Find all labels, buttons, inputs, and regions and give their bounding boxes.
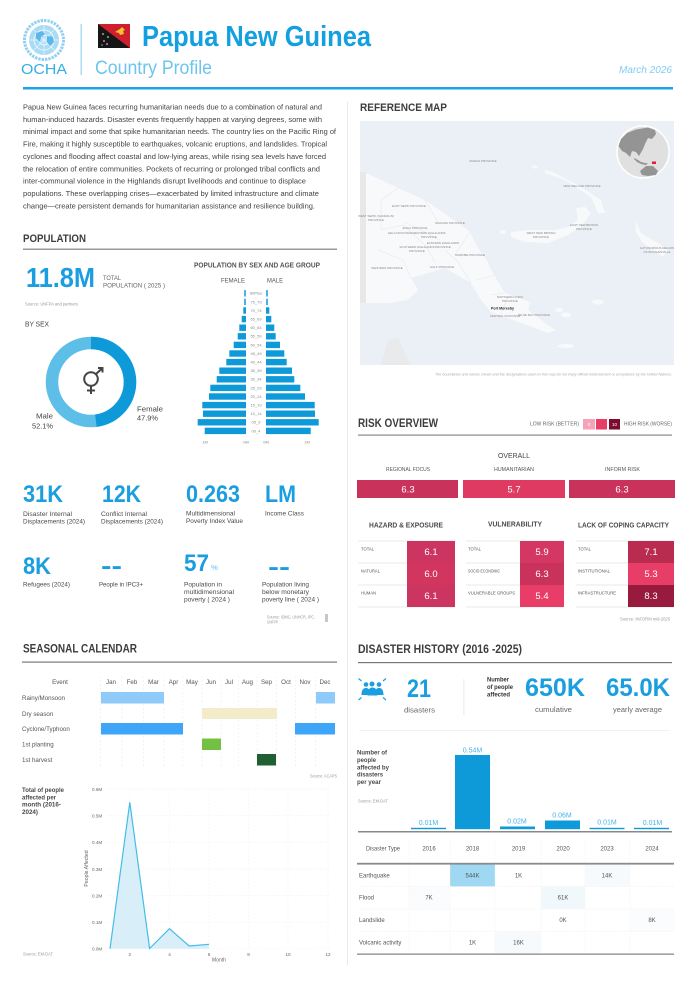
people affected label: affected: [487, 692, 510, 698]
x axis labels: 8: [247, 952, 250, 957]
table rows: [359, 874, 656, 946]
calendar months: Event: [52, 679, 68, 686]
bar chart label: affected by: [357, 764, 389, 771]
source: em-dat monthly: Source: EM-DAT: [23, 952, 53, 956]
table rows: 14K: [602, 874, 612, 880]
x axis labels: 10: [285, 952, 291, 957]
population pyramid: FEMALE: [221, 278, 246, 284]
overall scores: 5.7: [507, 484, 521, 496]
calendar rows: 1st planting: [22, 742, 54, 749]
stat: multidimensional poverty: %: [211, 563, 218, 572]
map labels: Port Moresby: [491, 306, 514, 310]
stat: income class: [265, 481, 305, 518]
donut chart: by sex: [32, 343, 163, 430]
table rows: Volcanic activity: [359, 940, 401, 946]
calendar rows: Dry season: [22, 711, 54, 718]
heading: disaster history: DISASTER HISTORY (2016 -2025): [358, 644, 522, 656]
heading: population: POPULATION: [23, 233, 86, 245]
table: hazard and exposure: HUMAN: [361, 590, 376, 596]
subtitle: Country Profile: [95, 58, 212, 79]
table: hazard and exposure: [358, 522, 455, 607]
map labels: MADANG PROVINCE: [435, 221, 465, 225]
age labels: 45_49: [250, 351, 262, 356]
age labels: 20_24: [250, 394, 262, 399]
risk legend: 0: [588, 422, 591, 427]
total population figure: Source: UNFPA and partners: [25, 302, 79, 306]
table: vulnerability: [466, 522, 564, 607]
intro text: cyclones and flooding affect coastal and low-lying areas, while rising sea levels have forced: [23, 152, 326, 161]
overall scores: OVERALL: [498, 453, 530, 460]
risk legend: 10: [612, 422, 617, 427]
overall scores: 6.3: [615, 484, 629, 496]
intro text: inter-communal violence in the Highlands disrupt livelihoods and continue to displace: [23, 176, 306, 186]
table: lack of coping capacity: INSTITUTIONAL: [578, 568, 610, 574]
calendar months: Mar: [148, 679, 159, 686]
bar chart label: disasters: [357, 772, 383, 779]
age labels: 05_9: [252, 420, 261, 425]
heat table: disaster type by year: [357, 840, 674, 955]
stat: disaster displacements: Disaster Internal: [23, 511, 73, 518]
line chart: [84, 787, 331, 964]
bar chart: people affected per year: 0.06M: [552, 812, 572, 820]
table header: 2019: [512, 846, 526, 852]
age labels: 15_19: [250, 402, 262, 408]
locator globe: [617, 126, 669, 178]
map labels: WESTERN HIGHLANDS: [412, 231, 446, 235]
map labels: ENGA PROVINCE: [403, 226, 427, 230]
table header: 2018: [466, 846, 480, 852]
table: vulnerability: VULNERABILITY: [488, 522, 542, 528]
age labels: 80Plus: [250, 291, 262, 296]
line chart: People Affected: [84, 850, 90, 887]
total population figure: 11.8M: [26, 262, 95, 293]
panel: seasonal calendar: [22, 644, 337, 778]
age labels: 25_29: [250, 385, 262, 390]
panel: population: [23, 233, 337, 444]
x axis labels: 12: [325, 952, 331, 957]
calendar months: Jul: [225, 679, 233, 686]
stat: multidimensional poverty: multidimensional: [184, 589, 235, 596]
stat: cumulative: cumulative: [535, 707, 572, 714]
icon: Papua New Guinea flag: [98, 24, 130, 48]
bar chart: people affected per year: 0.01M: [597, 820, 617, 826]
pyramid axis: 1M: [202, 440, 208, 444]
stat: monetary poverty: [262, 554, 319, 604]
table: hazard and exposure: 6.0: [424, 569, 438, 580]
map labels: PROVINCE: [409, 249, 425, 253]
map labels: EAST SEPIK PROVINCE: [392, 204, 426, 208]
risk legend: [530, 419, 672, 430]
stat: yearly average: [606, 674, 670, 714]
table: hazard and exposure: NATURAL: [361, 568, 380, 574]
age labels: 60_64: [250, 325, 262, 330]
table header: 2024: [645, 846, 659, 852]
overall scores: REGIONAL FOCUS: [386, 467, 430, 473]
stat: conflict displacements: [101, 481, 163, 526]
stat: cumulative: 650K: [525, 674, 585, 702]
stat: refugees: Refugees (2024): [23, 582, 70, 588]
stat: IPC3+: [99, 553, 143, 588]
panel: key figures: [23, 481, 328, 624]
population pyramid: POPULATION BY SEX AND AGE GROUP: [194, 260, 320, 270]
calendar months: Jun: [206, 679, 217, 686]
donut chart: by sex: 47.9%: [137, 414, 158, 422]
risk legend: HIGH RISK (WORSE): [624, 422, 672, 428]
calendar rows: Cyclone/Typhoon: [22, 726, 70, 733]
calendar rows: [22, 692, 335, 766]
icon: UN OCHA logo: OCHA: [21, 62, 67, 78]
map labels: PROVINCE: [421, 235, 437, 239]
age labels: 00_4: [252, 428, 261, 433]
map labels: PROVINCE: [576, 227, 592, 231]
table: lack of coping capacity: INFRASTRUCTURE: [578, 590, 616, 596]
table rows: Earthquake: [359, 874, 390, 880]
bar chart: people affected per year: [358, 748, 672, 832]
stat: yearly average: yearly average: [613, 707, 662, 714]
bar chart: people affected per year: 0.01M: [643, 820, 662, 827]
table header: Disaster Type: [366, 846, 401, 852]
heading: reference map: REFERENCE MAP: [360, 102, 447, 114]
title: Papua New Guinea: [142, 21, 372, 53]
table header: [366, 846, 659, 852]
bar chart label: Number of: [357, 750, 388, 756]
table: vulnerability: 5.9: [535, 547, 549, 558]
age labels: 35_39: [250, 368, 262, 373]
stat: monetary poverty: --: [268, 554, 290, 581]
stat: disasters count: disasters: [404, 708, 436, 714]
table rows: 1K: [469, 940, 476, 946]
intro text: change—create persistent demands for humanitarian assistance and resilience building.: [23, 202, 315, 210]
map labels: [358, 159, 674, 318]
table: vulnerability: TOTAL: [468, 546, 481, 552]
table rows: 544K: [465, 874, 480, 880]
chart title: Total of people: [22, 787, 64, 794]
population pyramid: [194, 260, 320, 444]
calendar rows: Rainy/Monsoon: [22, 695, 66, 702]
calendar months: Jan: [106, 679, 117, 686]
female bars: [198, 290, 246, 434]
stat: multidimensional poverty: [184, 550, 235, 604]
population pyramid: MALE: [267, 278, 284, 284]
bar chart label: people: [357, 757, 376, 764]
stat: refugees: 8K: [23, 553, 52, 580]
table rows: 0K: [559, 918, 567, 924]
stat: conflict displacements: Conflict Internal: [101, 511, 148, 518]
table: hazard and exposure: 6.1: [424, 591, 438, 602]
pyramid axis: 0M: [263, 440, 269, 444]
source: key figures: Source: IDMC, UNHCR, IPC,: [267, 614, 315, 620]
calendar months: Aug: [242, 679, 254, 686]
table: hazard and exposure: HAZARD & EXPOSURE: [369, 522, 443, 530]
y axis labels: [92, 787, 102, 952]
total population figure: [25, 262, 165, 306]
calendar months: Sep: [261, 679, 273, 686]
source: key figures: [267, 614, 328, 624]
stat: income class: Income Class: [265, 510, 305, 518]
stat: poverty index: 0.263: [186, 481, 240, 508]
calendar months: Apr: [169, 679, 178, 686]
stat: disaster displacements: [23, 481, 85, 526]
table rows: Landslide: [359, 918, 385, 924]
map labels: SOUTHERN HIGHLANDS: [399, 245, 435, 249]
table: lack of coping capacity: [576, 522, 674, 607]
table: vulnerability: 5.4: [535, 591, 549, 602]
table: lack of coping capacity: LACK OF COPING CAPACITY: [578, 522, 669, 530]
stat: monetary poverty: Population living: [262, 582, 309, 588]
y axis labels: 0.0M: [92, 947, 102, 952]
chart title: [22, 787, 64, 816]
age labels: 70_74: [250, 308, 262, 313]
icon: UN OCHA logo: [21, 20, 67, 78]
table header: 2020: [556, 846, 570, 852]
table: lack of coping capacity: 5.3: [644, 569, 658, 580]
age labels: 55_59: [250, 334, 262, 339]
map labels: MANUS PROVINCE: [469, 159, 497, 163]
panel: reference map: [358, 102, 674, 376]
table: lack of coping capacity: 8.3: [644, 591, 658, 602]
male bars: [266, 290, 319, 434]
stat: yearly average: 65.0K: [606, 674, 670, 702]
table: lack of coping capacity: 7.1: [644, 547, 658, 558]
bar chart label: [357, 750, 389, 804]
map: [358, 121, 674, 365]
stat: cumulative: [525, 674, 585, 714]
x axis labels: 6: [208, 952, 211, 957]
map labels: WESTERN PROVINCE: [371, 266, 403, 270]
pyramid axis: 1M: [304, 440, 310, 444]
table: hazard and exposure: 6.1: [424, 547, 438, 558]
map labels: HELA PROVINCE: [388, 231, 412, 235]
table header: 2023: [600, 846, 614, 852]
table rows: 7K: [425, 896, 433, 902]
map labels: NEW IRELAND PROVINCE: [563, 184, 601, 188]
icon: people: [358, 678, 386, 700]
stat: IPC3+: People in IPC3+: [99, 582, 143, 588]
calendar months: Oct: [281, 679, 291, 686]
map labels: WEST NEW BRITAIN: [527, 231, 555, 235]
intro text: minimal impact and some that spike humanitarian needs. The country lies on the Pacific Ring of: [23, 127, 337, 136]
map labels: EASTERN HIGHLANDS: [427, 241, 459, 245]
stat: disasters count: [404, 675, 436, 714]
stat: multidimensional poverty: poverty ( 2024 ): [184, 596, 230, 604]
x axis labels: [129, 952, 331, 957]
heading: seasonal calendar: SEASONAL CALENDAR: [23, 644, 138, 656]
overall scores: INFORM RISK: [605, 467, 640, 473]
intro text: Papua New Guinea faces recurring humanitarian needs due to a combination of natural and: [23, 102, 322, 112]
table rows: 8K: [648, 918, 656, 924]
bar chart: people affected per year: 0.54M: [463, 748, 482, 754]
map labels: MOROBE PROVINCE: [455, 253, 485, 257]
table: hazard and exposure: TOTAL: [361, 546, 374, 552]
y axis labels: 0.3M: [92, 867, 102, 872]
chart title: 2024): [22, 809, 38, 816]
y axis labels: 0.6M: [92, 787, 102, 792]
age labels: 30_34: [250, 377, 262, 382]
calendar months: [52, 679, 331, 686]
stat: multidimensional poverty: Population in: [184, 582, 222, 588]
intro text: populations. These overlapping crises—exacerbated by limited infrastructure and climate: [23, 189, 319, 198]
table: lack of coping capacity: TOTAL: [578, 546, 591, 552]
pyramid axis: 0M: [243, 440, 249, 444]
axis titles: Month: [212, 958, 226, 964]
table: vulnerability: VULNERABLE GROUPS: [468, 590, 515, 596]
source: calendar: Source: ACAPS: [310, 774, 337, 778]
age labels: 10_14: [250, 411, 262, 416]
age labels: 40_44: [250, 360, 262, 364]
header: [21, 20, 672, 79]
map labels: OF BOUGAINVILLE: [643, 250, 671, 254]
map disclaimer: The boundaries and names shown and the designations used on this map do not imply official endorsement or acceptance by the United Nations.: [435, 372, 672, 376]
stat: multidimensional poverty: 57: [184, 550, 209, 577]
map labels: WEST SEPIK (SANDAUN): [358, 214, 394, 218]
table: vulnerability: SOCIO-ECONOMIC: [468, 568, 501, 574]
map labels: PROVINCE: [435, 245, 451, 249]
x axis labels: 2: [129, 952, 132, 957]
stat: conflict displacements: 12K: [102, 481, 142, 508]
stat: monetary poverty: below monetary: [262, 589, 310, 596]
chart title: month (2016-: [22, 802, 61, 808]
total population figure: POPULATION ( 2025 ): [103, 284, 165, 290]
calendar months: Dec: [319, 679, 331, 686]
stat: refugees: [23, 553, 70, 588]
stat: IPC3+: --: [101, 553, 122, 580]
age labels: [250, 291, 262, 433]
overall scores: HUMANITARIAN: [494, 467, 534, 473]
map labels: GULF PROVINCE: [430, 265, 454, 269]
panel: disaster history: [357, 644, 674, 955]
intro text: the relocation of entire communities. Pockets of recurring or prolonged tribal conflicts and: [23, 164, 320, 174]
stat: disaster displacements: 31K: [23, 481, 64, 508]
intro text: human-induced hazards. Disaster events frequently happen at varying degrees, some with: [23, 115, 322, 124]
table rows: 1K: [515, 874, 522, 880]
x axis labels: 4: [168, 952, 171, 957]
calendar months: Feb: [127, 679, 138, 686]
risk legend: LOW RISK (BETTER): [530, 422, 579, 428]
stat: poverty index: [186, 481, 243, 525]
map labels: PROVINCE: [502, 299, 518, 303]
map labels: AUTONOMOUS REGION: [640, 246, 674, 250]
panel: risk overview: [357, 416, 675, 622]
source: risk: Source: INFORM mid-2025: [620, 616, 671, 622]
y axis labels: 0.1M: [92, 920, 102, 925]
bar chart label: Source: EM-DAT: [358, 798, 388, 804]
icon: gender symbol: [84, 368, 102, 394]
calendar rows: 1st harvest: [22, 757, 53, 764]
date: March 2026: [619, 65, 672, 76]
age labels: 65_69: [250, 316, 262, 322]
pyramid axis: [202, 440, 310, 444]
overall scores: 6.3: [401, 484, 415, 496]
panel: people affected per month: [22, 787, 331, 964]
map labels: MILNE BAY PROVINCE: [518, 313, 550, 317]
people affected label: [487, 678, 514, 698]
age labels: 75_79: [250, 299, 262, 304]
heading: risk overview: RISK OVERVIEW: [358, 416, 439, 430]
donut chart: by sex: 52.1%: [32, 422, 53, 430]
donut chart: by sex: Female: [137, 404, 163, 414]
source: key figures: UNFPP: [267, 620, 278, 624]
bar chart: people affected per year: 0.01M: [419, 820, 438, 827]
y axis labels: 0.5M: [92, 813, 102, 818]
calendar months: May: [186, 679, 199, 686]
stat: poverty index: Poverty Index Value: [186, 518, 243, 525]
chart title: affected per: [22, 794, 56, 801]
bar chart: people affected per year: 0.02M: [507, 818, 527, 826]
bar chart label: per year: [357, 779, 382, 786]
people affected label: Number: [487, 678, 510, 684]
by sex heading: BY SEX: [25, 322, 49, 328]
table: vulnerability: 6.3: [535, 569, 549, 580]
people affected label: of people: [487, 685, 514, 691]
map labels: NORTHERN (ORO): [497, 295, 523, 299]
donut chart: by sex: Male: [36, 412, 53, 420]
table rows: Flood: [359, 896, 374, 902]
calendar months: Nov: [299, 679, 311, 686]
stat: disasters count: 21: [407, 675, 431, 703]
stat: monetary poverty: poverty line ( 2024 ): [262, 596, 319, 604]
table header: 2016: [422, 846, 436, 852]
intro text: Fire, making it highly susceptible to earthquakes, volcanic eruptions, and landslides. Tropical: [23, 140, 327, 148]
map labels: EAST NEW BRITAIN: [570, 223, 598, 227]
stat: poverty index: Multidimensional: [186, 510, 236, 518]
stat: income class: LM: [265, 481, 296, 508]
age labels: 50_54: [250, 342, 262, 347]
map labels: CENTRAL PROVINCE: [490, 314, 520, 318]
map labels: PROVINCE: [533, 235, 549, 239]
table rows: 16K: [513, 940, 524, 946]
y axis labels: 0.4M: [92, 840, 102, 845]
total population figure: TOTAL: [103, 276, 122, 282]
table rows: 61K: [558, 896, 568, 902]
overall scores: [357, 453, 675, 498]
stat: conflict displacements: Displacements (2024): [101, 518, 163, 526]
map labels: PROVINCE: [368, 218, 384, 222]
intro text: [23, 102, 337, 210]
stat: disaster displacements: Displacements (2024): [23, 518, 85, 526]
y axis labels: 0.2M: [92, 893, 102, 898]
